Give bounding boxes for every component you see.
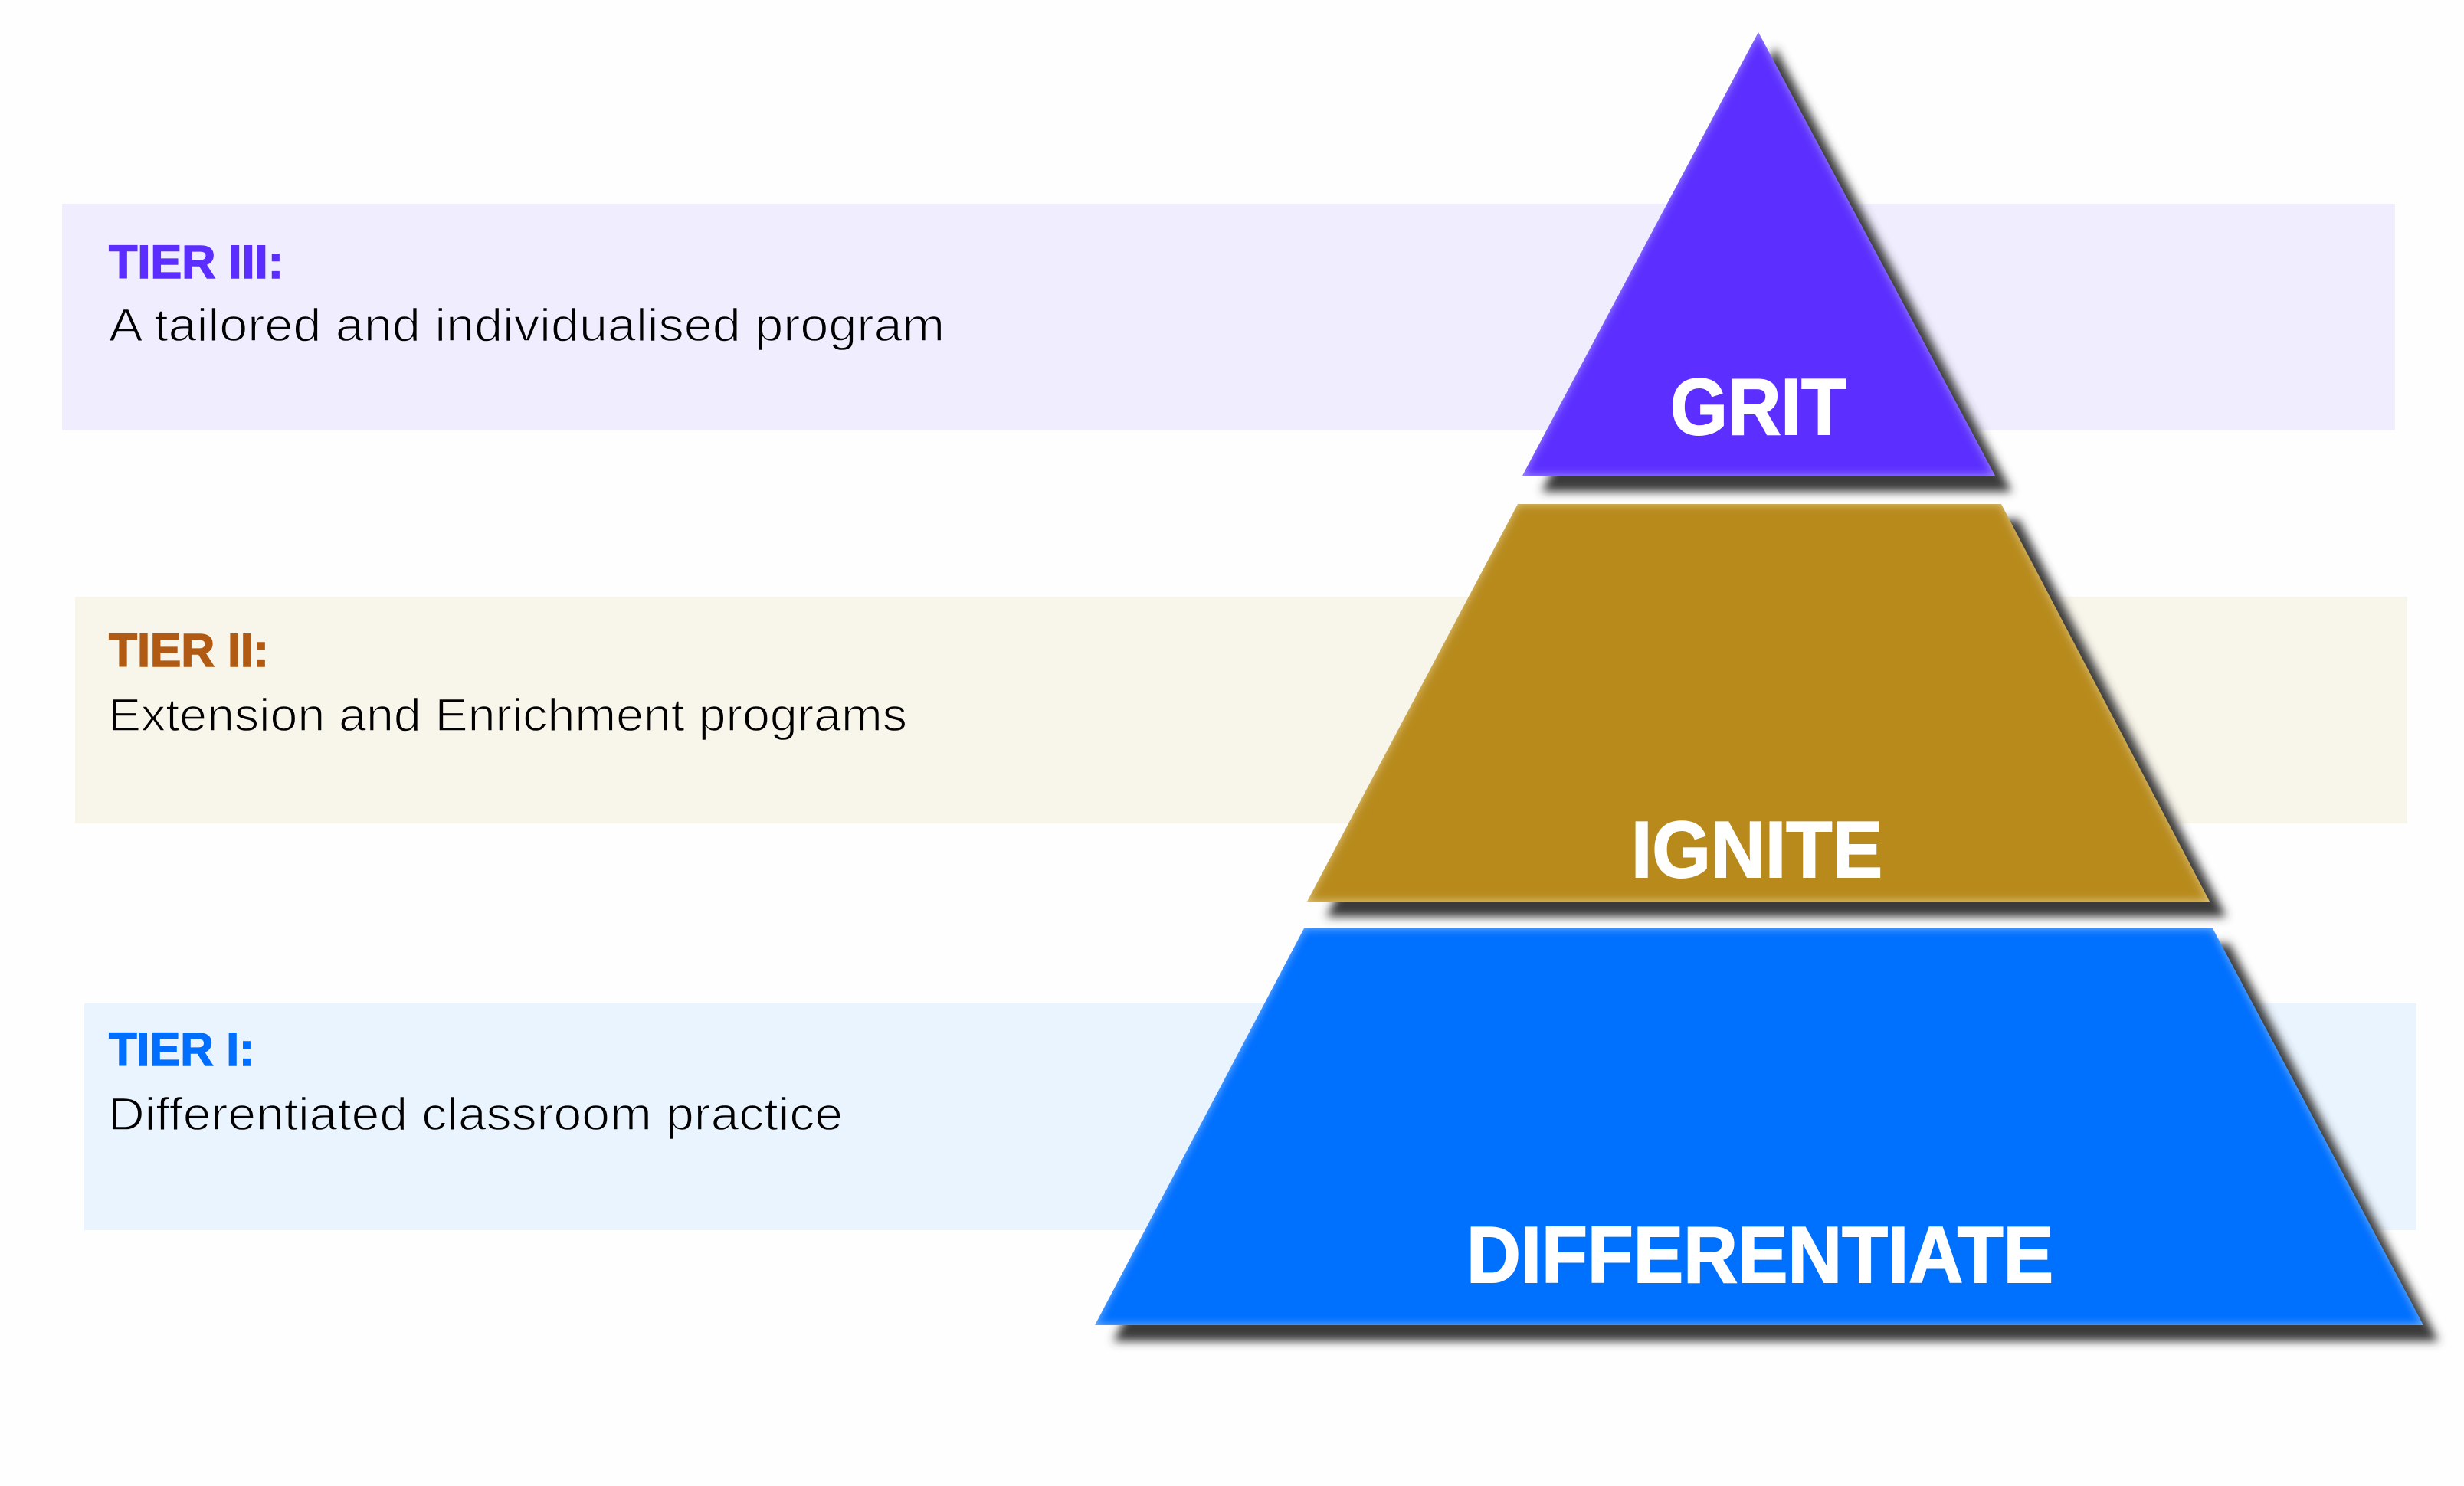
label: IGNITE: IGNITE	[1631, 806, 1882, 895]
pyramid	[1092, 31, 2439, 1341]
pyramid tier: DIFFERENTIATE	[1092, 925, 2439, 1341]
heading: tier I: TIER I:	[109, 1023, 254, 1075]
text: tier I description: Differentiated classroom practice	[108, 1088, 843, 1140]
pyramid tier: IGNITE	[1302, 502, 2226, 917]
panel: tier II band	[75, 597, 2407, 823]
text: tier II description: Extension and Enrichment programs	[108, 689, 907, 741]
pyramid tier: GRIT	[1517, 31, 2012, 492]
text: tier III description: A tailored and individualised program	[109, 299, 945, 351]
label: GRIT: GRIT	[1670, 363, 1846, 452]
heading: tier III: TIER III:	[109, 236, 283, 288]
panel: tier III band	[62, 204, 2395, 430]
heading: tier II: TIER II:	[109, 624, 269, 676]
panel: tier I band	[84, 1003, 2416, 1230]
label: DIFFERENTIATE: DIFFERENTIATE	[1466, 1211, 2053, 1300]
